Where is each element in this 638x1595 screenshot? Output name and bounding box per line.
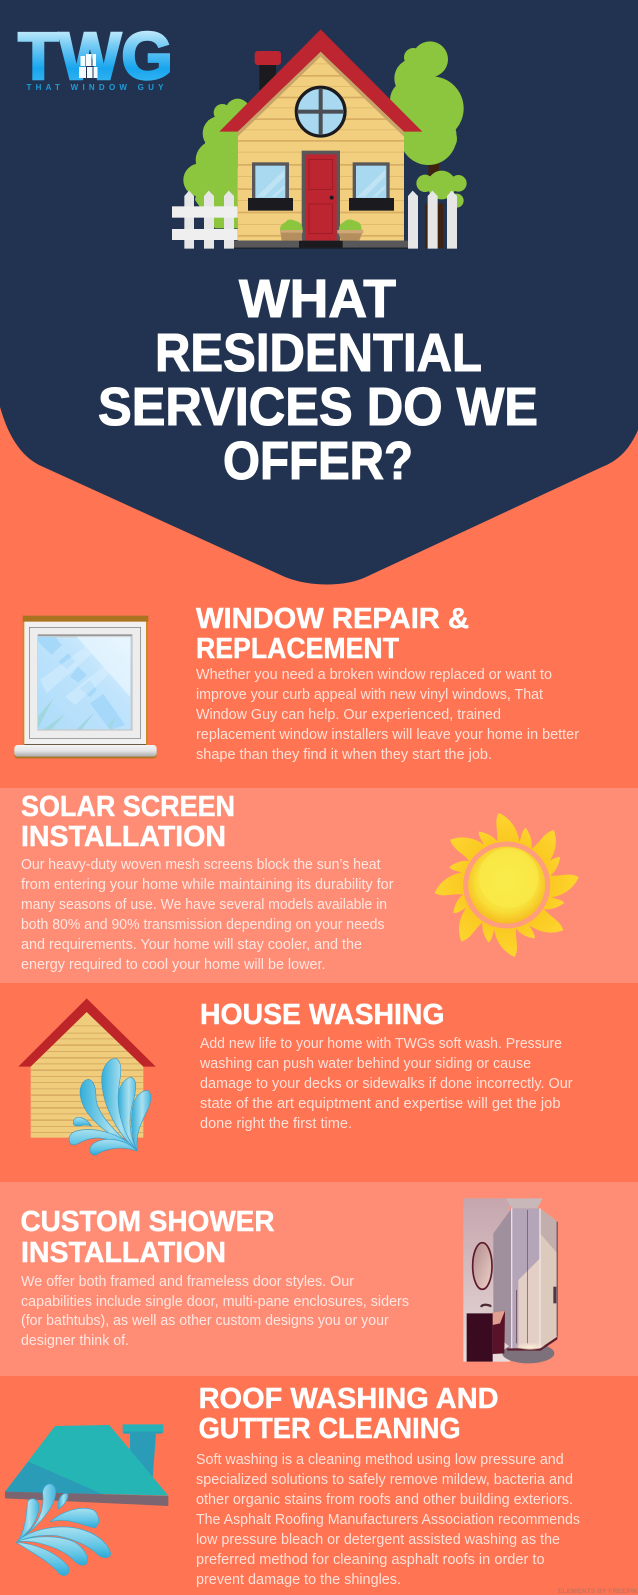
- body text: [199, 1036, 573, 1132]
- heading: WINDOW REPAIR &: [196, 603, 469, 635]
- header navy shape: [0, 0, 638, 584]
- door: [302, 151, 340, 241]
- heading: [196, 603, 469, 665]
- body text: Whether you need a broken window replaced or want to: [196, 667, 552, 683]
- body text: Add new life to your home with TWGs soft wash. Pressure: [200, 1036, 562, 1052]
- icon: window: [14, 616, 157, 758]
- panel: window repair: [14, 603, 579, 763]
- logo: That Window Guy: THAT WINDOW GUY: [26, 83, 164, 92]
- body text: designer think of.: [21, 1333, 129, 1349]
- heading: REPLACEMENT: [196, 633, 400, 665]
- body text: many seasons of use. We have several models available in: [21, 897, 387, 913]
- title: [98, 269, 538, 491]
- heading: SOLAR SCREEN: [21, 791, 235, 823]
- body text: and requirements. Your home will stay cooler, and the: [21, 937, 362, 953]
- icon: house illustration: [172, 29, 467, 249]
- body text: improve your curb appeal with new vinyl windows, That: [196, 687, 543, 703]
- panel: custom shower: [20, 1198, 558, 1363]
- credit: elements by freepik: ELEMENTS BY FREEPIK: [558, 1589, 638, 1595]
- title: WHAT: [239, 269, 396, 329]
- right planter: [337, 220, 363, 241]
- roof: [219, 29, 422, 132]
- body text: other organic stains from roofs and other building exteriors.: [196, 1492, 573, 1508]
- panel: solar screen: [21, 791, 579, 973]
- right tree trunk: [425, 160, 443, 248]
- body text: We offer both framed and frameless door styles. Our: [21, 1274, 354, 1290]
- round attic window: [296, 87, 345, 136]
- heading: CUSTOM SHOWER: [20, 1206, 274, 1238]
- panel: house washing: [18, 998, 573, 1155]
- body text: preferred method for cleaning asphalt roofs in order to: [196, 1552, 545, 1568]
- body text: capabilities include single door, multi-pane enclosures, siders: [21, 1294, 409, 1310]
- body text: done right the first time.: [200, 1116, 352, 1132]
- body text: energy required to cool your home will be lower.: [21, 957, 326, 973]
- chimney: [255, 51, 281, 90]
- icon: sun: [435, 813, 579, 957]
- body text: replacement window installers will leave your home in better: [196, 727, 579, 743]
- band: solar screen background: [0, 788, 638, 983]
- left picket fence: [172, 191, 238, 249]
- heading: INSTALLATION: [21, 1237, 226, 1269]
- porch base: [233, 241, 408, 249]
- icon: roof with splash: [5, 1424, 168, 1575]
- body text: Soft washing is a cleaning method using low pressure and: [196, 1452, 564, 1468]
- logo: That Window Guy: TWG: [18, 19, 173, 94]
- body text: shape than they find it when they start the job.: [196, 747, 492, 763]
- house wall: [238, 52, 404, 241]
- title: SERVICES DO WE: [98, 377, 538, 437]
- body text: (for bathtubs), as well as other custom designs you or your: [21, 1313, 389, 1329]
- heading: ROOF WASHING AND: [199, 1383, 499, 1415]
- left window: [248, 162, 293, 211]
- body text: [196, 667, 579, 763]
- heading: [199, 1383, 499, 1445]
- body text: Window Guy can help. Our experienced, trained: [196, 707, 501, 723]
- water splash: [16, 1484, 111, 1575]
- body text: [21, 857, 394, 973]
- heading: INSTALLATION: [21, 821, 226, 853]
- icon: shower enclosure: [463, 1198, 558, 1363]
- body text: Our heavy-duty woven mesh screens block the sun’s heat: [21, 857, 381, 873]
- left tree foliage: [183, 99, 250, 228]
- icon: washed house: [18, 998, 156, 1155]
- panel: roof washing: [5, 1383, 580, 1588]
- right window: [349, 162, 394, 211]
- title: RESIDENTIAL: [155, 323, 482, 383]
- heading: GUTTER CLEANING: [199, 1413, 461, 1445]
- water splash: [69, 1058, 151, 1155]
- heading: [21, 791, 235, 853]
- body text: [196, 1452, 580, 1588]
- body text: [21, 1274, 409, 1349]
- left planter: [280, 220, 303, 241]
- right tree foliage: [390, 41, 467, 208]
- body text: from entering your home while maintaining its durability for: [21, 877, 394, 893]
- title: OFFER?: [223, 431, 413, 491]
- body text: damage to your decks or sidewalks if done incorrectly. Our: [200, 1076, 573, 1092]
- body text: low pressure bleach or detergent assisted washing as the: [196, 1532, 560, 1548]
- body text: The Asphalt Roofing Manufacturers Association recommends: [196, 1512, 580, 1528]
- heading: HOUSE WASHING: [200, 999, 444, 1031]
- body text: specialized solutions to safely remove mildew, bacteria and: [196, 1472, 573, 1488]
- band: custom shower background: [0, 1182, 638, 1376]
- body text: washing can push water behind your siding or cause: [199, 1056, 531, 1072]
- body text: both 80% and 90% transmission depending on your needs: [21, 917, 384, 933]
- body text: state of the art equiptment and expertise will get the job: [200, 1096, 561, 1112]
- right picket fence: [408, 191, 457, 249]
- heading: [20, 1206, 274, 1269]
- wall siding: [238, 52, 404, 237]
- body text: prevent damage to the shingles.: [196, 1572, 401, 1588]
